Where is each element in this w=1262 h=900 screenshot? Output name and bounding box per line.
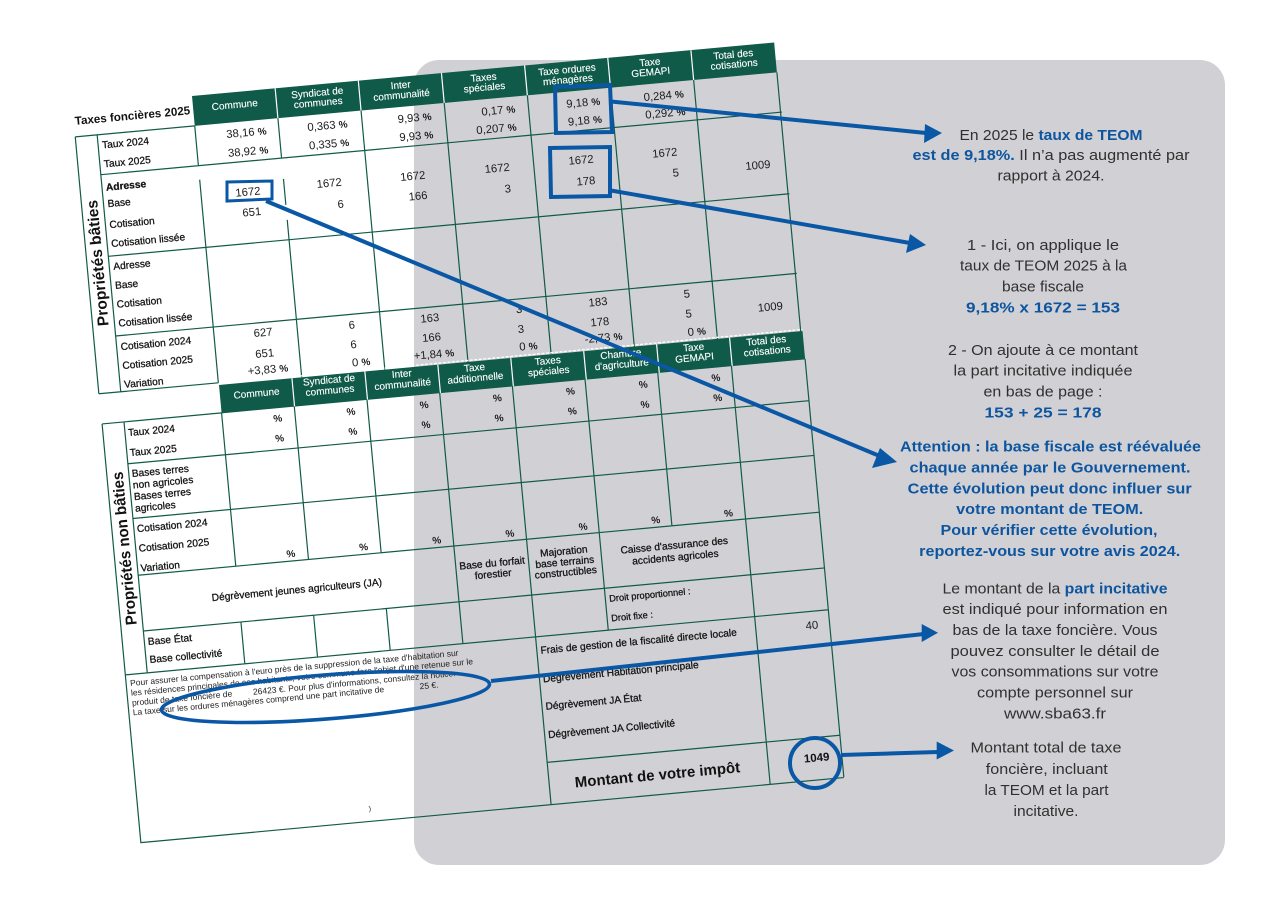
yearly totals values: 178: [590, 316, 610, 329]
text block: TEOM rate: est de 9,18%. Il n’a pas augmenté par: [912, 147, 1190, 164]
text block: TEOM rate: rapport à 2024.: [998, 168, 1104, 185]
table grid: [102, 359, 844, 843]
total amount value: 1049: [803, 751, 830, 766]
table header band: Inter: [390, 79, 412, 92]
table header band: Taxe ordures: [538, 62, 596, 79]
percent marks: %: [348, 426, 358, 438]
text block: incentive part: compte personnel sur: [977, 684, 1133, 701]
yearly totals values: 0 %: [519, 340, 538, 354]
rates values: [226, 87, 686, 160]
row labels: Bases terres: [134, 487, 191, 503]
row labels: [128, 421, 223, 666]
rates values: 0,207 %: [476, 121, 517, 137]
row labels: [102, 134, 199, 391]
table header band: d'agriculture: [594, 357, 650, 373]
highlight: total circle: [790, 738, 840, 788]
percent marks: %: [273, 413, 283, 425]
text block: incentive part: pouvez consulter le détail de: [950, 643, 1160, 660]
text block: incentive part: www.sba63.fr: [1003, 705, 1106, 722]
row labels: Taux 2025: [129, 444, 178, 459]
base and contribution values: [235, 137, 771, 220]
cell labels: Base du forfait: [459, 556, 526, 573]
text block: step 1: 9,18% x 1672 = 153: [966, 300, 1120, 317]
cell labels: Majoration: [540, 544, 588, 560]
incentive note paragraph: [130, 646, 476, 718]
text block: warning: [900, 439, 1201, 560]
base and contribution values: 651: [242, 206, 262, 220]
row labels: Bases terres: [131, 464, 189, 480]
text block: total amount: foncière, incluant: [986, 761, 1109, 778]
highlight: commune base box: [227, 181, 272, 201]
percent marks: [273, 373, 734, 561]
table header band: Syndicat de: [303, 373, 356, 389]
percent marks: %: [724, 508, 734, 520]
percent marks: %: [432, 535, 442, 547]
base and contribution values: 6: [337, 199, 344, 211]
table header band: Syndicat de: [291, 86, 344, 101]
percent marks: %: [711, 373, 721, 385]
text block: incentive part: [942, 580, 1168, 722]
percent marks: %: [638, 379, 648, 391]
text block: incentive part: est indiqué pour information en: [942, 601, 1168, 618]
row labels: Taux 2024: [128, 424, 176, 439]
table header band: cotisations: [743, 344, 791, 359]
row labels: Cotisation lissée: [118, 312, 193, 330]
text block: warning: chaque année par le Gouvernement.: [910, 460, 1190, 477]
cell labels: Droit fixe :: [611, 610, 653, 623]
percent marks: %: [492, 393, 502, 405]
table header band: Taxes: [534, 355, 561, 368]
cell labels: 40: [805, 619, 819, 633]
text block: step 2: en bas de page :: [984, 384, 1102, 401]
percent marks: %: [359, 542, 369, 554]
row labels: Cotisation: [109, 216, 155, 231]
row labels: Cotisation 2025: [122, 355, 194, 372]
text block: step 1: [960, 237, 1128, 317]
text block: warning: votre montant de TEOM.: [956, 501, 1143, 518]
cell labels: constructibles: [534, 565, 597, 582]
yearly totals values: +1,84 %: [413, 347, 455, 363]
yearly totals values: 6: [350, 339, 357, 352]
base and contribution values: 1672: [484, 162, 510, 176]
rates values: 9,93 %: [397, 111, 432, 126]
row labels: Cotisation 2025: [138, 537, 210, 555]
table header band: cotisations: [710, 58, 758, 73]
rates values: 0,363 %: [307, 118, 348, 134]
arrow: ellipse to incentive text: [491, 624, 938, 681]
row labels: Variation: [124, 376, 164, 391]
rates values: 9,18 %: [566, 96, 601, 111]
cell labels: base terrains: [535, 555, 595, 571]
table grid: [75, 72, 802, 396]
row labels: Cotisation 2024: [136, 518, 208, 535]
yearly totals values: 0 %: [352, 356, 371, 369]
table header band: ménagères: [542, 73, 593, 88]
text block: step 2: 153 + 25 = 178: [984, 404, 1102, 421]
base and contribution values: 1672: [652, 146, 678, 161]
section label: Propriétés bâties: [84, 199, 113, 327]
percent marks: %: [419, 400, 429, 412]
arrow: base to calculation: [611, 190, 926, 253]
table: propriétés bâties: [73, 42, 802, 396]
table header band: Total des: [746, 334, 787, 349]
rates values: 38,16 %: [226, 125, 267, 141]
incentive note paragraph: La taxe sur les ordures ménagères comprend une part incitative de: [132, 684, 385, 717]
base and contribution values: 5: [672, 167, 680, 180]
table header band: GEMAPI: [631, 66, 671, 80]
incentive note paragraph: 26423 €. Pour plus d'informations, consultez la notice.: [252, 668, 456, 697]
cell labels: Dégrèvement JA Collectivité: [548, 718, 676, 741]
text block: TEOM rate: En 2025 le taux de TEOM: [960, 127, 1142, 144]
text block: warning: reportez-vous sur votre avis 2024.: [919, 543, 1180, 560]
percent marks: %: [566, 386, 576, 398]
cell labels: Dégrèvement Habitation principale: [543, 660, 700, 685]
text block: step 1: base fiscale: [1002, 279, 1084, 296]
base and contribution values: 1009: [745, 159, 771, 173]
base and contribution values: 178: [576, 175, 596, 189]
table header band: Chambre: [600, 347, 642, 362]
row labels: Variation: [140, 560, 180, 575]
highlight: TEOM rate box: [555, 85, 612, 133]
table header band: Commune: [233, 386, 280, 402]
percent marks: %: [286, 549, 296, 560]
text block: step 1: 1 - Ici, on applique le: [967, 237, 1119, 254]
small mark: ): [368, 806, 371, 813]
incentive note paragraph: les résidences principales de ses habitants, votre commune fera l'objet d'une retenue sur le: [131, 656, 474, 698]
table header band: additionnelle: [447, 371, 504, 387]
incentive note paragraph: produit de taxe foncière de: [131, 688, 233, 708]
text block: incentive part: bas de la taxe foncière. Vous: [952, 622, 1158, 639]
text block: warning: Attention : la base fiscale est réévaluée: [900, 439, 1201, 456]
percent marks: %: [275, 433, 285, 445]
yearly totals values: 163: [420, 312, 440, 326]
panel: grey background: [414, 60, 1225, 865]
highlight: TEOM base box: [550, 147, 610, 197]
yearly totals values: +3,83 %: [247, 362, 289, 378]
yearly totals values: -2,73 %: [584, 331, 623, 346]
cell labels: Dégrèvement jeunes agriculteurs (JA): [211, 577, 383, 604]
percent marks: %: [578, 522, 588, 533]
row labels: Base: [107, 197, 132, 210]
table header band: [192, 43, 777, 126]
table header band: communalité: [374, 377, 432, 393]
row labels: Adresse: [106, 179, 147, 194]
text block: step 2: 2 - On ajoute à ce montant: [948, 342, 1139, 359]
row labels: Base: [115, 279, 139, 292]
table header band: spéciales: [463, 81, 506, 96]
cell labels: Frais de gestion de la fiscalité directe locale: [540, 628, 738, 657]
percent marks: %: [421, 420, 431, 431]
table: propriétés non bâties: [99, 329, 844, 843]
table header band: Commune: [211, 98, 259, 113]
text block: step 1: taux de TEOM 2025 à la: [960, 258, 1128, 275]
row labels: Cotisation lissée: [111, 232, 186, 250]
percent marks: %: [713, 393, 723, 404]
row labels: Taux 2024: [102, 136, 150, 151]
yearly totals values: 5: [685, 308, 692, 321]
row labels: Adresse: [113, 258, 151, 273]
text block: total amount: la TEOM et la part: [984, 782, 1109, 799]
table title: Taxes foncières 2025: [74, 104, 191, 128]
text block: incentive part: Le montant de la part incitative: [942, 580, 1168, 597]
yearly totals values: 651: [255, 347, 275, 361]
highlight: incentive note ellipse: [160, 662, 491, 732]
table header band: communalité: [373, 88, 431, 104]
base and contribution values: 1672: [568, 154, 594, 168]
table header band: Taxes: [470, 72, 497, 85]
table header band: Taxe: [639, 56, 661, 69]
yearly totals values: 6: [348, 319, 356, 332]
table header band: communes: [293, 96, 343, 111]
text block: warning: Cette évolution peut donc influer sur: [908, 480, 1192, 497]
text block: total amount: [970, 740, 1122, 820]
incentive note paragraph: Pour assurer la compensation à l'euro près de la suppression de la taxe d'habitation sur: [130, 648, 459, 688]
cell labels: Droit proportionnel :: [609, 586, 691, 604]
yearly totals values: 3: [515, 304, 523, 316]
table header band: GEMAPI: [675, 351, 714, 366]
percent marks: %: [346, 407, 356, 418]
cell labels: Dégrèvement JA État: [545, 691, 642, 713]
section label: Propriétés non bâties: [110, 471, 141, 626]
percent marks: %: [651, 515, 661, 527]
yearly totals values: 166: [422, 331, 442, 345]
yearly totals values: 5: [683, 288, 691, 301]
base and contribution values: 1672: [400, 170, 426, 184]
rates values: 0,335 %: [309, 137, 350, 152]
row labels: non agricoles: [132, 475, 194, 492]
rates values: 0,284 %: [643, 88, 684, 104]
table header band: [219, 329, 805, 413]
percent marks: %: [494, 413, 504, 425]
yearly totals values: 183: [588, 296, 608, 310]
table header band: Inter: [391, 368, 413, 381]
row labels: Base État: [147, 631, 193, 648]
text block: total amount: incitative.: [1014, 803, 1078, 820]
rates values: 38,92 %: [228, 144, 269, 160]
yearly totals values: [244, 280, 785, 379]
text block: incentive part: vos consommations sur votre: [952, 664, 1158, 681]
row labels: Cotisation: [116, 296, 162, 311]
yearly totals values: 0 %: [687, 325, 707, 339]
row labels: Base collectivité: [149, 648, 223, 666]
text block: TEOM rate: [912, 127, 1190, 185]
table header band: Taxe: [683, 342, 705, 355]
table header band: spéciales: [528, 365, 570, 379]
table header band: Total des: [713, 48, 754, 63]
row labels: Cotisation 2024: [120, 336, 192, 353]
arrow: total to total text: [841, 742, 954, 760]
yearly totals values: 3: [517, 324, 525, 336]
cell labels: [210, 524, 827, 771]
rates values: 0,292 %: [645, 106, 686, 122]
row labels: agricoles: [135, 500, 176, 515]
yearly totals values: 627: [253, 326, 273, 340]
text block: step 2: la part incitative indiquée: [954, 363, 1132, 380]
percent marks: %: [640, 399, 650, 411]
rates values: 0,17 %: [481, 103, 516, 119]
cell labels: Caisse d'assurance des: [620, 536, 729, 557]
total amount label: Montant de votre impôt: [574, 759, 741, 791]
arrow: commune base to warning: [266, 201, 897, 468]
text block: warning: Pour vérifier cette évolution,: [940, 522, 1158, 539]
percent marks: %: [568, 406, 577, 418]
base and contribution values: 3: [504, 183, 512, 196]
table header band: communes: [305, 384, 355, 399]
table header band: Taxe: [464, 362, 486, 375]
rates values: 9,18 %: [567, 114, 603, 129]
base and contribution values: 166: [408, 190, 428, 204]
cell labels: accidents agricoles: [632, 549, 719, 568]
text block: total amount: Montant total de taxe: [970, 740, 1122, 757]
text block: step 2: [948, 342, 1139, 421]
percent marks: %: [505, 528, 515, 540]
row labels: Taux 2025: [103, 155, 152, 170]
yearly totals values: 1009: [757, 300, 783, 315]
rates values: 9,93 %: [399, 129, 434, 144]
cell labels: forestier: [474, 568, 513, 582]
incentive note paragraph: 25 €.: [419, 680, 439, 691]
base and contribution values: 1672: [235, 185, 261, 200]
arrow: rate to explanation: [611, 102, 942, 143]
base and contribution values: 1672: [316, 177, 342, 191]
